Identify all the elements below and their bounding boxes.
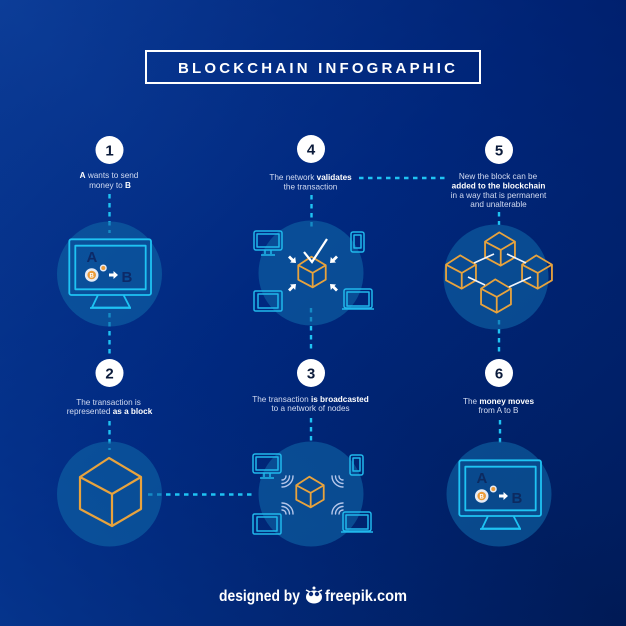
text: step 1: wants to send xyxy=(87,171,139,180)
number badge 6 xyxy=(485,359,513,387)
panel: step 6 xyxy=(446,359,552,546)
footer credit xyxy=(219,586,407,605)
number badge 2: 2 xyxy=(105,366,114,382)
icon: blockchain cubes xyxy=(446,232,552,313)
circle backdrop 4 xyxy=(258,220,364,326)
icon: freepik mascot xyxy=(306,586,322,604)
footer credit: designed by xyxy=(219,588,300,605)
footer credit: freepik.com xyxy=(325,588,407,605)
circle backdrop 6 xyxy=(446,442,552,546)
text: step 3: is broadcasted xyxy=(311,395,369,404)
icon: monitor with A to B payment: B xyxy=(90,273,95,279)
icon: network devices xyxy=(253,454,373,534)
text: step 3: to a network of nodes xyxy=(271,404,350,413)
number badge 6: 6 xyxy=(495,366,503,382)
number badge 5 xyxy=(485,136,513,164)
icon: monitor with A to B payment: B xyxy=(512,490,522,507)
number badge 4: 4 xyxy=(307,142,316,158)
icon: large cube xyxy=(80,458,141,526)
text: step 5: added to the blockchain xyxy=(452,182,545,190)
text: step 3: The transaction xyxy=(252,395,311,404)
number badge 1 xyxy=(96,136,124,164)
title xyxy=(146,51,480,83)
text: step 5: and unalterable xyxy=(470,200,527,209)
icon: network devices xyxy=(254,231,374,311)
icon: cube xyxy=(298,257,326,287)
text: step 6: money moves xyxy=(479,397,534,406)
number badge 1: 1 xyxy=(105,142,114,160)
icon: monitor with A to B payment: B xyxy=(122,269,132,286)
text: step 6: The xyxy=(463,397,479,406)
icon: arrows to cube xyxy=(288,256,338,292)
text: step 2: The transaction is xyxy=(76,398,141,407)
panel: step 5 xyxy=(444,136,552,330)
circle backdrop 5 xyxy=(444,224,548,330)
icon: monitor with A to B payment: A xyxy=(476,470,488,487)
panel: step 2 xyxy=(57,359,162,546)
text: step 4: validates xyxy=(317,173,352,182)
connectors xyxy=(110,178,500,494)
text: step 1: B xyxy=(125,181,131,190)
number badge 4 xyxy=(297,135,325,163)
panel: step 1 xyxy=(57,136,162,326)
title: BLOCKCHAIN INFOGRAPHIC xyxy=(178,60,455,77)
text: step 4: the transaction xyxy=(284,182,338,192)
circle backdrop 2 xyxy=(57,442,162,546)
icon: monitor with A to B payment xyxy=(459,460,541,529)
text: step 5: New the block can be xyxy=(459,172,538,181)
icon: signal waves xyxy=(282,476,343,514)
icon: block links xyxy=(468,254,531,287)
icon: monitor with A to B payment xyxy=(69,239,151,308)
number badge 3 xyxy=(297,359,325,387)
number badge 2 xyxy=(96,359,124,387)
number badge 3: 3 xyxy=(307,366,315,382)
text: step 5: in a way that is permanent xyxy=(451,191,547,200)
text: step 2: represented xyxy=(67,407,113,416)
number badge 5: 5 xyxy=(495,142,503,160)
icon: monitor with A to B payment: A xyxy=(86,249,98,266)
text: step 1: money to xyxy=(89,181,125,190)
icon: cube xyxy=(296,477,324,507)
circle backdrop 3 xyxy=(258,442,364,546)
text: step 1: A xyxy=(80,171,86,180)
text: step 4: The network xyxy=(269,173,317,182)
circle backdrop 1 xyxy=(57,222,162,326)
icon: check mark xyxy=(304,239,327,262)
text: step 2: as a block xyxy=(113,407,153,416)
panel: step 4 xyxy=(254,135,374,326)
text: step 6: from A to B xyxy=(478,406,519,415)
panel: step 3 xyxy=(252,359,373,546)
icon: monitor with A to B payment: B xyxy=(480,494,485,500)
